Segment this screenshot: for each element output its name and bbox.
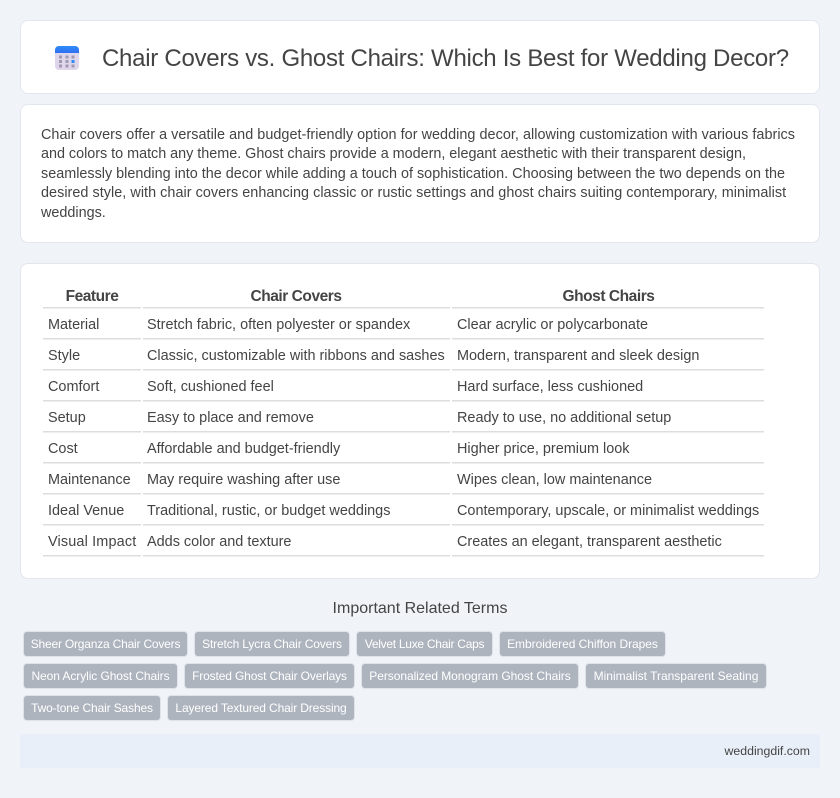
row: cost <box>43 441 764 464</box>
related term tags <box>23 631 767 721</box>
column headers <box>43 288 764 309</box>
title: Chair Covers vs. Ghost Chairs: Which Is Best for Wedding Decor? <box>102 45 789 72</box>
related term tags: Layered Textured Chair Dressing <box>175 701 347 715</box>
row: comfort: Comfort <box>48 379 99 395</box>
related term tags: Minimalist Transparent Seating <box>594 669 758 683</box>
column headers: Feature <box>66 288 118 305</box>
row: visual impact <box>43 534 764 557</box>
related term tags: Frosted Ghost Chair Overlays <box>192 669 347 683</box>
icon: calendar <box>55 46 79 70</box>
related term tags: Neon Acrylic Ghost Chairs <box>31 669 170 683</box>
row: material: Clear acrylic or polycarbonate <box>457 317 648 333</box>
row: comfort: Hard surface, less cushioned <box>457 379 643 395</box>
footer: source: weddingdif.com <box>725 744 810 758</box>
panel: comparison table <box>20 263 820 579</box>
row: ideal venue: Contemporary, upscale, or minimalist weddings <box>457 503 759 519</box>
row: material: Stretch fabric, often polyester or spandex <box>147 317 410 333</box>
row: ideal venue: Ideal Venue <box>48 503 124 519</box>
row: cost: Affordable and budget-friendly <box>147 441 340 457</box>
row: ideal venue <box>43 503 764 526</box>
row: visual impact: Creates an elegant, transparent aesthetic <box>457 534 722 550</box>
row: style <box>43 348 764 371</box>
row: style: Modern, transparent and sleek design <box>457 348 699 364</box>
row: style: Style <box>48 348 80 364</box>
related term tags: Stretch Lycra Chair Covers <box>202 637 342 651</box>
summary text: desired style, with chair covers enhancing classic or rustic settings and ghost chairs suiting contemporary, minimalist <box>41 185 786 201</box>
row: setup: Easy to place and remove <box>147 410 314 426</box>
row: maintenance <box>43 472 764 495</box>
row: cost: Higher price, premium look <box>457 441 630 457</box>
row: maintenance: Maintenance <box>48 472 131 488</box>
related term tags: Personalized Monogram Ghost Chairs <box>369 669 571 683</box>
row: comfort: Soft, cushioned feel <box>147 379 274 395</box>
row: style: Classic, customizable with ribbons and sashes <box>147 348 445 364</box>
summary text: seamlessly blending into the decor while adding a touch of sophistication. Choosing between the two depends on the <box>41 166 785 182</box>
summary text: and colors to match any theme. Ghost chairs provide a modern, elegant aesthetic with their transparent design, <box>41 146 746 162</box>
summary text: weddings. <box>41 205 106 221</box>
row: visual impact: Adds color and texture <box>147 534 291 550</box>
related term tags: Two-tone Chair Sashes <box>31 701 153 715</box>
row: maintenance: Wipes clean, low maintenance <box>457 472 652 488</box>
row: setup <box>43 410 764 433</box>
row: comfort <box>43 379 764 402</box>
panel: summary <box>20 104 820 243</box>
row: setup: Ready to use, no additional setup <box>457 410 671 426</box>
row: material <box>43 317 764 340</box>
summary text <box>41 127 795 221</box>
row: material: Material <box>48 317 99 333</box>
footer: source <box>20 734 820 768</box>
row: cost: Cost <box>48 441 78 457</box>
row: maintenance: May require washing after use <box>147 472 340 488</box>
column headers: Ghost Chairs <box>563 288 654 305</box>
row: ideal venue: Traditional, rustic, or budget weddings <box>147 503 390 519</box>
heading: important related terms: Important Related Terms <box>333 600 507 617</box>
related term tags: Embroidered Chiffon Drapes <box>507 637 658 651</box>
row: setup: Setup <box>48 410 86 426</box>
panel: title header <box>20 20 820 94</box>
column headers: Chair Covers <box>250 288 342 305</box>
related term tags: Sheer Organza Chair Covers <box>31 637 180 651</box>
summary text: Chair covers offer a versatile and budget-friendly option for wedding decor, allowing customization with various fabrics <box>41 127 795 143</box>
row: visual impact: Visual Impact <box>48 534 136 550</box>
related term tags: Velvet Luxe Chair Caps <box>365 637 484 651</box>
comparison table <box>43 288 764 557</box>
